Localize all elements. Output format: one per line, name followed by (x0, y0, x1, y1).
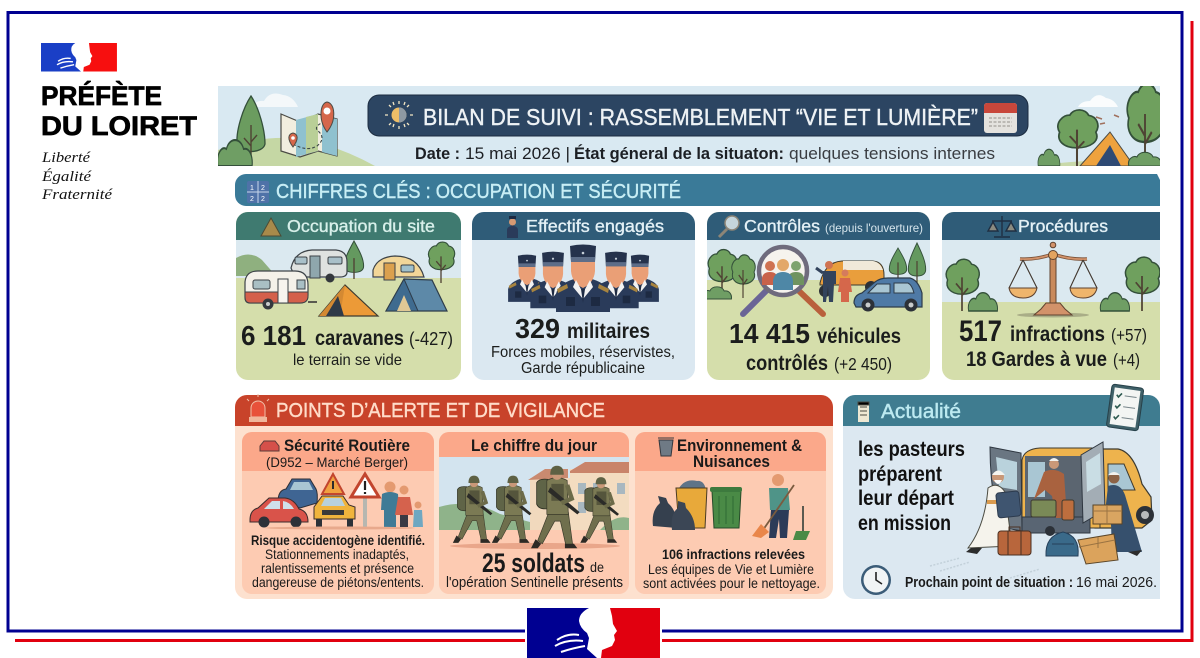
heading: Occupation du site (287, 216, 435, 236)
stat: véhicules: (+2 450) (834, 354, 892, 374)
card title: Nuisances (693, 452, 770, 471)
heading: Préfète du Loiret: PRÉFÈTE (41, 80, 162, 111)
icon: calendar (984, 103, 1017, 133)
icon: siren (247, 394, 269, 422)
heading: (depuis l'ouverture) (825, 221, 923, 235)
panel: effectifs engagés (472, 212, 695, 380)
motto: Égalité (41, 168, 93, 185)
stat: caravanes: caravanes (315, 327, 404, 350)
text: prochain point: Prochain point de situation : (905, 575, 1073, 591)
card title: Sécurité Routière (284, 436, 410, 455)
icon: notepad (858, 402, 869, 422)
illustration: gendarmes (508, 244, 659, 312)
card text: sont activées pour le nettoyage. (643, 575, 820, 591)
date line: 15 mai 2026 | (465, 144, 570, 163)
panel: banner (218, 84, 1164, 170)
section title: CHIFFRES CLÉS : OCCUPATION ET SÉCURITÉ (276, 180, 681, 203)
card: environnement et nuisances (635, 432, 826, 594)
stat: caravanes (241, 320, 453, 369)
stat: infractions and gardes à vue: 517 (959, 315, 1002, 348)
icon: sun (385, 101, 413, 129)
heading: Actualité (881, 401, 961, 423)
stat: militaires (491, 313, 675, 377)
icon: clipboard (1106, 384, 1144, 431)
panel: actualité (843, 384, 1160, 599)
card text: Stationnements inadaptés, (265, 547, 409, 562)
icon: numbers: 2 (250, 196, 254, 203)
stat: infractions and gardes à vue: infractions (1010, 323, 1105, 346)
panel: contrôles (702, 212, 930, 380)
illustration: scales (942, 240, 1160, 318)
icon: Marianne flag (41, 43, 117, 72)
card: le chiffre du jour (439, 432, 629, 594)
illustration: soldiers (439, 457, 629, 549)
date line: Date : (415, 144, 460, 163)
stat: infractions and gardes à vue: (+57) (1111, 325, 1147, 345)
illustration: van and pastors (930, 442, 1154, 578)
text: les pasteurs préparent: les pasteurs (858, 438, 965, 461)
icon: camp tent and trees (1038, 86, 1160, 166)
card text: 106 infractions relevées (662, 546, 805, 562)
stat: soldats (446, 548, 623, 591)
text: les pasteurs préparent (858, 438, 965, 535)
heading: Préfète du Loiret (41, 80, 198, 141)
stat: caravanes: 6 181 (241, 320, 306, 351)
stat: soldats: 25 soldats (482, 548, 585, 578)
card title (266, 436, 410, 470)
stat: soldats: l'opération Sentinelle présents (446, 575, 623, 591)
stat: soldats: de (590, 559, 604, 575)
illustration: road risk (250, 474, 423, 530)
title pill (368, 95, 1028, 136)
stat: véhicules: 14 415 (729, 318, 810, 349)
panel: procédures (942, 212, 1160, 380)
stat: militaires: Garde républicaine (521, 360, 645, 377)
logo: Préfète du Loiret (41, 43, 198, 203)
text: les pasteurs préparent: leur départ (858, 487, 954, 510)
panel: occupation du site (236, 212, 461, 380)
stat: caravanes: le terrain se vide (293, 352, 402, 369)
card text: Les équipes de Vie et Lumière (648, 561, 814, 577)
card: sécurité routière (242, 432, 434, 594)
motto: Liberté (41, 150, 91, 166)
icon: numbers: 2 (261, 185, 265, 192)
icon: clock (861, 565, 891, 595)
stat: véhicules (729, 318, 901, 375)
icon: numbers (247, 181, 269, 203)
date line: quelques tensions internes (789, 144, 995, 163)
text: prochain point: 16 mai 2026. (1076, 575, 1157, 591)
stat: infractions and gardes à vue (959, 315, 1147, 371)
heading: Préfète du Loiret: DU LOIRET (41, 111, 198, 141)
stat: véhicules: véhicules (817, 325, 901, 348)
icon: bin (658, 438, 674, 456)
icon: numbers: 2 (261, 196, 265, 203)
stat: caravanes: (-427) (409, 329, 453, 349)
card text: ralentissements et présence (261, 561, 414, 576)
card title (677, 436, 802, 471)
title text: BILAN DE SUIVI : RASSEMBLEMENT “VIE ET LUMIÈRE” (423, 104, 978, 130)
stat: véhicules: contrôlés (746, 352, 828, 375)
icon: small car (260, 441, 279, 451)
heading: Contrôles (744, 216, 820, 236)
text: les pasteurs préparent: en mission (858, 512, 951, 535)
date line: État géneral de la situaton: (574, 144, 784, 163)
card text (251, 533, 425, 590)
heading: Effectifs engagés (526, 216, 664, 236)
section bar: chiffres clés (235, 174, 1160, 206)
icon: map (281, 102, 337, 157)
icon: tree (218, 96, 265, 166)
motto (41, 150, 114, 203)
icon: Marianne flag, bottom (527, 608, 660, 658)
card text: Risque accidentogène identifié. (251, 533, 425, 548)
stat: infractions and gardes à vue: (+4) (1113, 350, 1140, 370)
illustration: caravans and tents (236, 240, 461, 316)
stat: militaires: Forces mobiles, réservistes, (491, 344, 675, 361)
card text (643, 546, 820, 591)
illustration: controls (702, 240, 930, 314)
stat: militaires: 329 (515, 313, 560, 344)
heading (719, 216, 923, 237)
motto: Fraternité (41, 187, 114, 203)
card title: Environnement & (677, 436, 802, 455)
section title: POINTS D’ALERTE ET DE VIGILANCE (276, 400, 605, 422)
icon: numbers: 1 (250, 185, 254, 192)
heading: Procédures (1018, 216, 1108, 236)
text: les pasteurs préparent: préparent (858, 463, 942, 486)
card text: dangereuse de piétons/entents. (252, 575, 424, 590)
illustration: waste and cleaner (653, 474, 810, 540)
card title: (D952 – Marché Berger) (266, 454, 408, 470)
panel: points d'alerte (235, 394, 833, 599)
stat: militaires: militaires (567, 320, 650, 343)
card title: Le chiffre du jour (471, 436, 597, 455)
stat: infractions and gardes à vue: 18 Gardes à vue (966, 348, 1107, 371)
